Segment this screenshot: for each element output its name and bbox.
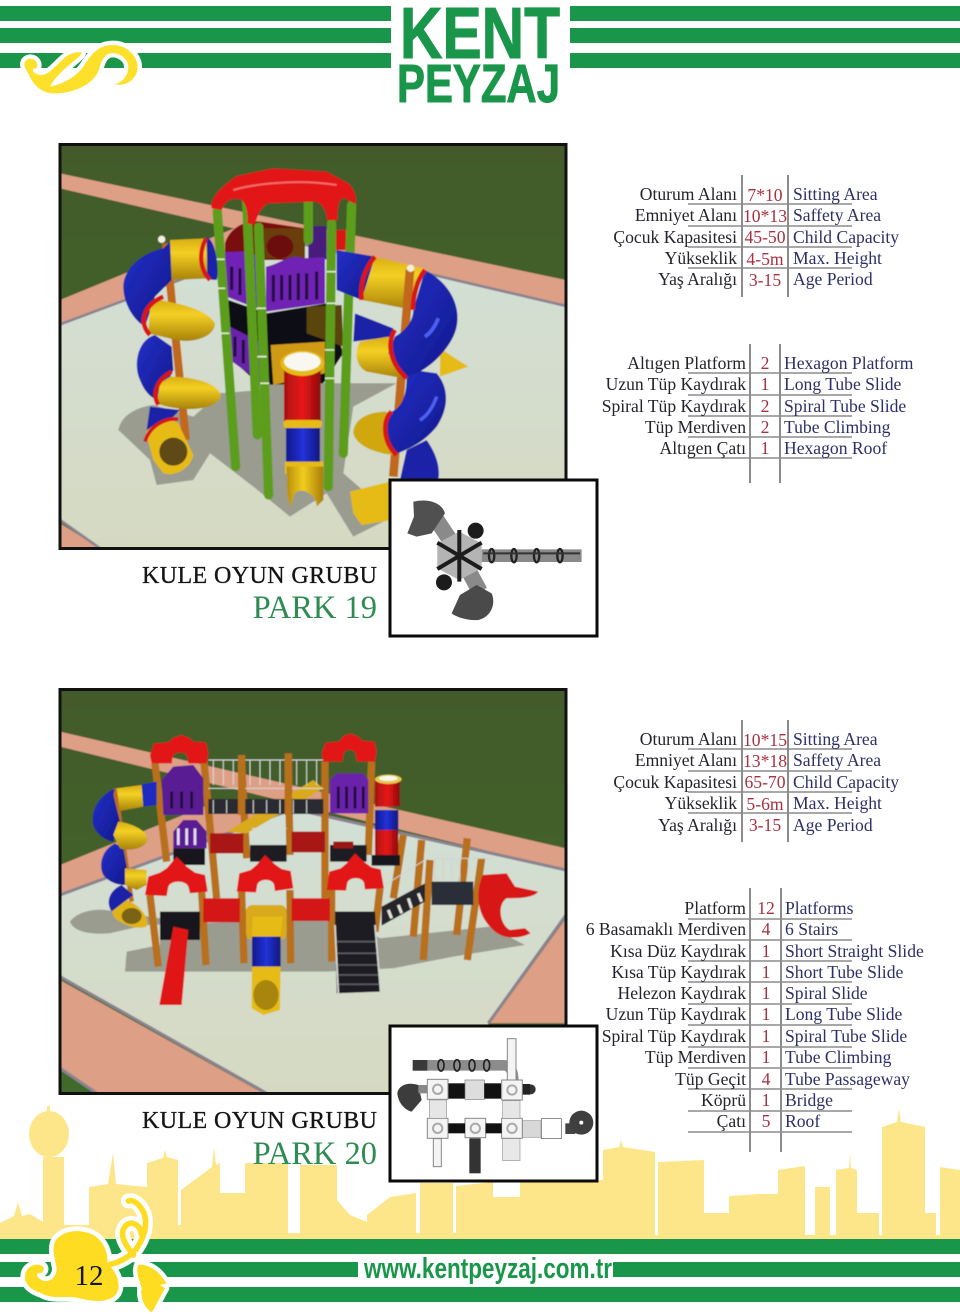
table: Park 19 components: 2 [761, 353, 769, 373]
table: Park 20 components: 12 [757, 898, 775, 918]
heading: Park 19 [142, 563, 377, 626]
red roof [211, 168, 356, 225]
centre climbing tube [271, 342, 325, 385]
table: Park 20 components: Köprü [701, 1090, 746, 1110]
logo: Kent Peyzaj [397, 0, 560, 114]
table: Park 20 components: Platforms [785, 898, 854, 918]
table: Park 20 components: Bridge [785, 1090, 833, 1110]
purple panels [162, 765, 203, 815]
table: Park 20 components: Tüp Geçit [675, 1069, 746, 1089]
table: Park 19 specifications: Yükseklik [665, 248, 737, 268]
concrete floor [60, 809, 566, 1093]
table: Park 20 components: 1 [762, 1090, 770, 1110]
photo frame: Park 19 [60, 144, 566, 548]
climbing tube right of deck [375, 780, 400, 807]
table: Park 20 components: Spiral Slide [785, 983, 868, 1003]
table: Park 19 specifications: Sitting Area [793, 184, 878, 204]
right tube slide [440, 348, 468, 377]
black stairs [335, 912, 380, 993]
grass [60, 689, 566, 1093]
table: Park 19 components: Hexagon Platform [784, 353, 914, 373]
deck platforms lower [160, 912, 200, 940]
logo: Kent Peyzaj: PEYZAJ [397, 54, 560, 114]
table: Park 20 components [586, 888, 924, 1152]
table: Park 19 specifications: Çocuk Kapasitesi [613, 227, 737, 247]
table: Park 20 specifications: Sitting Area [793, 729, 878, 749]
background: yellow city skyline [0, 1106, 960, 1240]
table: Park 20 specifications: Max. Height [793, 793, 882, 813]
table: Park 20 components: Short Tube Slide [785, 962, 903, 982]
table: Park 20 specifications: Çocuk Kapasitesi [613, 772, 737, 792]
table: Park 20 specifications: Emniyet Alanı [635, 750, 737, 770]
pink paths [60, 732, 566, 1093]
table: Park 20 components: 1 [762, 1026, 770, 1046]
red straight slide [159, 927, 188, 1005]
table: Park 19 specifications [613, 175, 899, 297]
table: Park 20 components: Short Straight Slide [785, 941, 924, 961]
table: Park 20 components: 1 [762, 1047, 770, 1067]
concrete floor [60, 241, 566, 548]
table: Park 19 specifications: Yaş Aralığı [658, 269, 737, 289]
table: Park 19 specifications: 10*13 [743, 206, 787, 226]
photo frame: Park 20 [60, 690, 566, 1094]
table: Park 19 components: Tube Climbing [784, 417, 891, 437]
purple panels [230, 327, 260, 382]
red tubes [210, 833, 243, 853]
table: Park 20 components: Platform [684, 898, 746, 918]
table: Park 19 components: Altıgen Çatı [660, 438, 746, 458]
table: Park 19 specifications: 45-50 [744, 227, 786, 247]
table: Park 20 components: Tüp Merdiven [645, 1047, 746, 1067]
pink path [60, 173, 566, 548]
inset: Park 20 plan drawing [390, 1026, 597, 1181]
heading: Park 20: PARK 20 [253, 1136, 377, 1172]
table: Park 19 components: 2 [761, 417, 769, 437]
footer stripes [0, 1239, 960, 1314]
table: Park 20 components: 1 [762, 962, 770, 982]
table: Park 20 components: 5 [762, 1111, 771, 1131]
table: Park 19 components: 2 [761, 396, 769, 416]
table: Park 20 specifications: Oturum Alanı [640, 729, 737, 749]
website address: www.kentpeyzaj.com.tr [363, 1253, 612, 1285]
table: Park 20 components: Helezon Kaydırak [618, 983, 746, 1003]
heading: Park 20: KULE OYUN GRUBU [142, 1108, 377, 1134]
table: Park 19 specifications: 4-5m [746, 249, 784, 269]
table: Park 20 specifications: Yaş Aralığı [658, 815, 737, 835]
table: Park 19 components: Spiral Tube Slide [784, 396, 906, 416]
red spiral slide [478, 873, 538, 938]
table: Park 19 specifications: Emniyet Alanı [635, 205, 737, 225]
table: Park 20 specifications: 13*18 [743, 751, 787, 771]
table: Park 19 specifications: Age Period [793, 269, 873, 289]
table: Park 20 components: Long Tube Slide [785, 1004, 903, 1024]
table: Park 20 components: 4 [762, 1069, 771, 1089]
table: Park 20 components: 1 [762, 1004, 770, 1024]
table: Park 20 components: Kısa Düz Kaydırak [610, 941, 746, 961]
table: Park 20 components: Tube Passageway [785, 1069, 910, 1089]
left tube slide [166, 243, 186, 440]
left tube slide [115, 788, 132, 902]
red roofs [145, 733, 384, 896]
table: Park 20 components: Çatı [717, 1111, 746, 1131]
table: Park 20 components: 1 [762, 941, 770, 961]
table: Park 20 components: 6 Basamaklı Merdiven [586, 919, 746, 939]
table: Park 20 specifications: Child Capacity [793, 772, 899, 792]
table: Park 19 specifications: Child Capacity [793, 227, 899, 247]
table: Park 19 specifications: 3-15 [749, 270, 781, 290]
table: Park 19 components: Tüp Merdiven [645, 417, 746, 437]
yellow and blue tube slide [246, 905, 287, 940]
table: Park 20 components: 4 [762, 919, 771, 939]
table: Park 19 components: Hexagon Roof [784, 438, 887, 458]
table: Park 20 specifications: 65-70 [744, 772, 786, 792]
table: Park 19 specifications: 7*10 [747, 185, 783, 205]
inset: Park 19 plan drawing [390, 480, 597, 636]
heading: Park 19: KULE OYUN GRUBU [142, 563, 377, 589]
heading: Park 19: PARK 19 [253, 590, 377, 626]
icon: yellow ornament top left [24, 45, 138, 93]
upper deck [227, 780, 323, 833]
table: Park 19 specifications: Oturum Alanı [640, 184, 737, 204]
table: Park 20 specifications: 3-15 [749, 815, 781, 835]
table: Park 19 components: 1 [761, 374, 769, 394]
table: Park 20 specifications: Age Period [793, 815, 873, 835]
rear tower parts [225, 221, 305, 260]
table: Park 20 specifications: 10*15 [743, 730, 787, 750]
header stripes [0, 6, 960, 68]
table: Park 20 components: Tube Climbing [785, 1047, 892, 1067]
table: Park 20 components: 1 [762, 983, 770, 1003]
table: Park 19 components: Spiral Tüp Kaydırak [602, 396, 746, 416]
green poles [217, 200, 352, 495]
grass [60, 144, 566, 548]
table: Park 20 components: Kısa Tüp Kaydırak [611, 962, 746, 982]
icon: yellow ornament bottom left [25, 1201, 167, 1312]
ground shadow [70, 910, 525, 972]
ground shadow [118, 383, 397, 537]
bridge [382, 883, 425, 926]
table: Park 20 specifications [613, 720, 899, 842]
table: Park 20 components: 6 Stairs [785, 919, 838, 939]
table: Park 19 components: Long Tube Slide [784, 374, 902, 394]
table: Park 19 components [602, 344, 914, 483]
table: Park 19 specifications: Max. Height [793, 248, 882, 268]
panel: photo of Park 20 playground [60, 689, 566, 1093]
table: Park 20 components: Roof [785, 1111, 820, 1131]
table: Park 20 specifications: Yükseklik [665, 793, 737, 813]
heading: Park 20 [142, 1108, 377, 1172]
wooden posts [150, 762, 482, 967]
table: Park 19 components: Altıgen Platform [627, 353, 746, 373]
table: Park 20 components: Spiral Tüp Kaydırak [602, 1026, 746, 1046]
table: Park 20 specifications: 5-6m [746, 794, 784, 814]
table: Park 19 components: Uzun Tüp Kaydırak [606, 374, 746, 394]
table: Park 20 components: Spiral Tube Slide [785, 1026, 907, 1046]
table: Park 19 specifications: Saffety Area [793, 205, 881, 225]
panel: photo of Park 19 tower playground [60, 144, 566, 548]
table: Park 20 components: Uzun Tüp Kaydırak [606, 1004, 746, 1024]
table: Park 19 components: 1 [761, 438, 769, 458]
table: Park 20 specifications: Saffety Area [793, 750, 881, 770]
page number: 12 [74, 1260, 104, 1292]
